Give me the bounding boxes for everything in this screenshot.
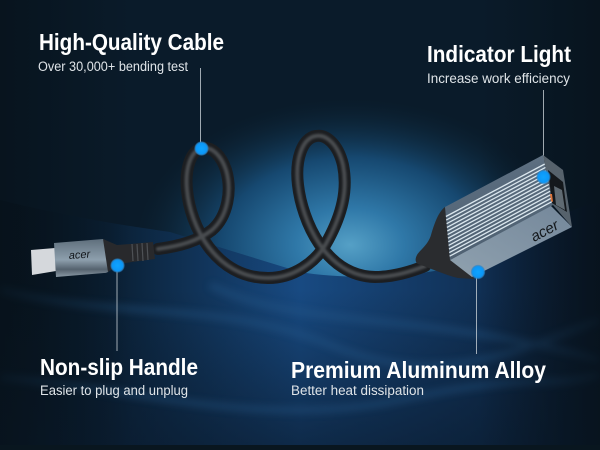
rubber boot [416, 207, 474, 279]
ribbed housing [445, 155, 553, 260]
label: Indicator Light [427, 41, 571, 86]
leader lines [117, 68, 544, 354]
label: Non-slip Handle [40, 354, 198, 398]
logo: acer [528, 216, 563, 246]
label: Premium Aluminum Alloy: Better heat dissipation [291, 383, 424, 398]
aluminum shell [54, 239, 110, 277]
label: Non-slip Handle: Easier to plug and unplug [40, 383, 188, 398]
label: Non-slip Handle: Non-slip Handle [40, 354, 198, 380]
ethernet adapter [416, 155, 572, 279]
USB-C metal plug [31, 248, 56, 275]
lower face [450, 205, 572, 277]
label: Indicator Light: Increase work efficiency [427, 71, 570, 86]
label: Indicator Light: Indicator Light [427, 41, 571, 67]
cable [158, 136, 425, 278]
label: High-Quality Cable [38, 29, 224, 74]
hotspot dots [110, 141, 551, 280]
strain relief grip [103, 239, 155, 272]
label: High-Quality Cable: Over 30,000+ bending test [38, 59, 188, 74]
logo: acer [68, 248, 92, 262]
port face [543, 155, 572, 227]
USB-C handle [31, 239, 155, 277]
label: Premium Aluminum Alloy [291, 357, 546, 398]
RJ45 port [548, 170, 567, 212]
label: Premium Aluminum Alloy: Premium Aluminum Alloy [291, 357, 546, 383]
label: High-Quality Cable: High-Quality Cable [39, 29, 224, 55]
